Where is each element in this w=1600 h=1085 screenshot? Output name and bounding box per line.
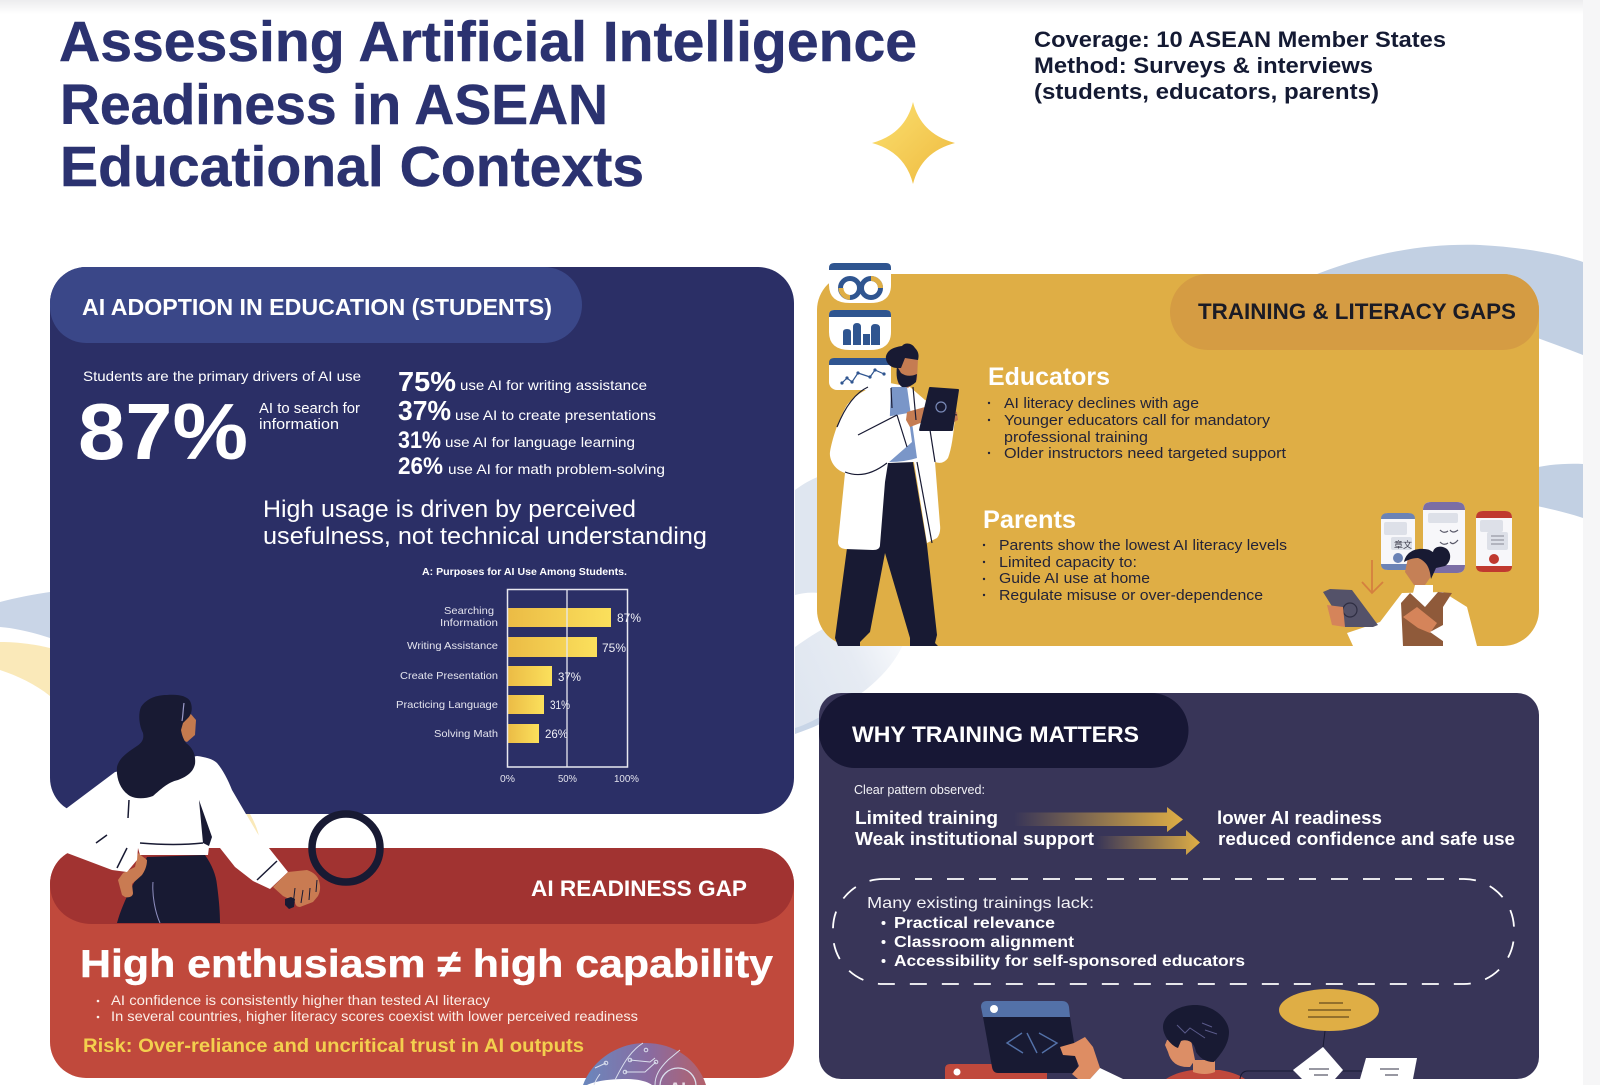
stat: 87 percent [78, 387, 360, 476]
header band: AI readiness gap: AI READINESS GAP [531, 876, 747, 901]
bullet list: readiness findings: AI confidence is consistently higher than tested AI literacy [111, 992, 490, 1008]
callout: dashed training gaps box [833, 879, 1514, 984]
text block: educators: Educators [988, 363, 1110, 391]
text block: educators [988, 363, 1287, 462]
illustration: tablet with code [945, 1001, 1123, 1079]
stat: 87 percent: information [259, 417, 339, 433]
icon: AI brain [583, 1043, 706, 1085]
bar chart: purposes for AI use: Solving Math [434, 728, 498, 740]
header pill: training and literacy: TRAINING & LITERACY GAPS [1198, 299, 1516, 324]
stat list: AI uses: 26% [398, 453, 443, 480]
bar chart: purposes for AI use: 26% [545, 727, 568, 741]
text block: educators: professional training [1004, 429, 1148, 446]
illustration: parent with tablet and apps: 章文 [1394, 539, 1412, 550]
heading: enthusiasm vs capability: High enthusiasm ≠ high capability [80, 943, 774, 986]
text: perceived usefulness: usefulness, not technical understanding [263, 523, 707, 550]
causes: limited training and weak support [855, 808, 1094, 849]
stat list: AI uses: use AI for writing assistance [460, 377, 647, 393]
bar chart: purposes for AI use: 50% [558, 773, 577, 785]
bar chart: purposes for AI use: Create Presentation [400, 670, 498, 682]
callout: dashed training gaps box: Classroom alignment [894, 934, 1075, 951]
text block: educators: AI literacy declines with age [1004, 395, 1199, 412]
illustration: woman with magnifying glass [40, 695, 380, 923]
coverage and method note: Coverage: 10 ASEAN Member States [1034, 27, 1446, 52]
text block: parents: Limited capacity to: [999, 554, 1137, 571]
arrow: training to readiness [1014, 807, 1183, 832]
illustration: speech bubbles [1240, 989, 1417, 1079]
callout: dashed training gaps box: Many existing trainings lack: [867, 895, 1094, 912]
panel: training and literacy gaps [817, 274, 1539, 646]
stat list: AI uses: use AI for language learning [445, 434, 635, 450]
text: clear pattern: Clear pattern observed: [854, 783, 985, 797]
bullet list: readiness findings [97, 992, 638, 1024]
header band: AI readiness gap [50, 848, 794, 924]
stat list: AI uses: 37% [398, 395, 451, 426]
arrow: support to confidence [1096, 830, 1200, 855]
header pill: why training matters [819, 693, 1188, 768]
bar chart: purposes for AI use: 87% [617, 611, 641, 625]
callout: dashed training gaps box: Accessibility for self-sponsored educators [894, 953, 1245, 970]
title: Readiness in ASEAN [60, 73, 608, 137]
stat list: AI uses: 31% [398, 427, 441, 454]
bar chart: purposes for AI use: Searching [444, 605, 494, 617]
text block: parents: Guide AI use at home [999, 570, 1150, 587]
causes: limited training and weak support: Limited training [855, 808, 998, 828]
text: primary drivers: Students are the primary drivers of AI use [83, 368, 361, 384]
bar chart: purposes for AI use: Information [440, 617, 498, 629]
bar chart: purposes for AI use: 75% [602, 641, 626, 655]
illustration: parent with tablet and apps [1323, 502, 1512, 646]
header pill: why training matters: WHY TRAINING MATTERS [852, 722, 1139, 747]
panel: AI readiness gap [50, 848, 794, 1078]
stat list: AI uses: use AI for math problem-solving [448, 461, 665, 477]
stat list: AI uses: 75% [398, 366, 456, 397]
coverage and method note [1034, 27, 1446, 104]
background swooshes [0, 245, 1583, 836]
icons: dashboard cards [829, 263, 891, 390]
stat list: AI uses [398, 366, 665, 480]
text block: parents: Parents show the lowest AI literacy levels [999, 537, 1287, 554]
stat list: AI uses: use AI to create presentations [455, 407, 656, 423]
panel: why training matters [819, 693, 1539, 1079]
header pill: AI adoption [50, 267, 582, 343]
bar chart: purposes for AI use: Practicing Language [396, 699, 498, 711]
bar chart: purposes for AI use: 100% [614, 773, 639, 785]
text block: parents: Regulate misuse or over-dependence [999, 587, 1263, 604]
icon: gold sparkle star [872, 102, 955, 184]
stat: 87 percent: AI to search for [259, 401, 360, 417]
header pill: AI adoption: AI ADOPTION IN EDUCATION (STUDENTS) [82, 294, 552, 320]
bar chart: purposes for AI use: 31% [550, 698, 570, 712]
effects: lower readiness and reduced confidence: reduced confidence and safe use [1218, 829, 1515, 849]
text block: parents [983, 506, 1287, 604]
causes: limited training and weak support: Weak institutional support [855, 829, 1094, 849]
title: Educational Contexts [60, 135, 644, 199]
text: perceived usefulness: High usage is driven by perceived [263, 496, 636, 523]
text block: educators: Older instructors need targeted support [1004, 445, 1287, 462]
bar chart: purposes for AI use: A: Purposes for AI Use Among Students. [422, 567, 627, 578]
callout: dashed training gaps box: Practical relevance [894, 915, 1055, 932]
coverage and method note: Method: Surveys & interviews [1034, 53, 1373, 78]
text block: parents: Parents [983, 506, 1076, 534]
coverage and method note: (students, educators, parents) [1034, 79, 1379, 104]
bar chart: purposes for AI use: 37% [558, 670, 581, 684]
effects: lower readiness and reduced confidence [1217, 808, 1515, 849]
header pill: training and literacy [1170, 274, 1539, 350]
callout: risk: Risk: Over-reliance and uncritical trust in AI outputs [83, 1036, 584, 1057]
bullet list: readiness findings: In several countries, higher literacy scores coexist with lower perceived readiness [111, 1008, 638, 1024]
text: perceived usefulness [263, 496, 707, 550]
panel: AI adoption in education [50, 267, 794, 814]
stat: 87 percent: 87% [78, 387, 248, 476]
title [59, 10, 917, 199]
bar chart: purposes for AI use: 0% [500, 773, 515, 785]
bar chart: purposes for AI use [396, 567, 641, 785]
illustration: person from behind [1163, 1005, 1245, 1079]
bar chart: purposes for AI use: Writing Assistance [407, 640, 498, 652]
text block: educators: Younger educators call for mandatory [1004, 412, 1271, 429]
effects: lower readiness and reduced confidence: lower AI readiness [1217, 808, 1382, 828]
illustration: educator with tablet [830, 344, 958, 646]
title: Assessing Artificial Intelligence [59, 10, 917, 74]
